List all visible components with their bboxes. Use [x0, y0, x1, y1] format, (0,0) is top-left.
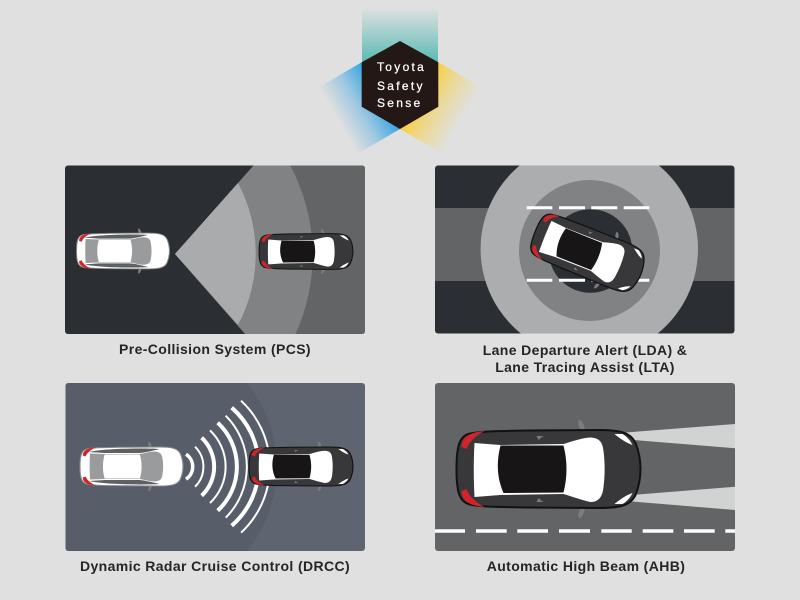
logo text: Safety [377, 79, 425, 93]
lower lane dashes [527, 279, 649, 282]
upper lane dashes [527, 206, 649, 209]
lower light beam [623, 487, 735, 510]
inner circle [549, 209, 632, 293]
panel: Pre-Collision System [65, 165, 365, 335]
label: DRCC: Dynamic Radar Cruise Control (DRCC) [80, 558, 350, 574]
logo text [377, 60, 426, 110]
panel: Automatic High Beam [435, 383, 735, 551]
logo: Toyota Safety Sense hexagon [314, 8, 486, 157]
panel background [435, 383, 735, 551]
panel background [435, 165, 735, 334]
label: AHB: Automatic High Beam (AHB) [487, 558, 685, 574]
dark car ahead [249, 442, 353, 491]
logo text: Toyota [377, 60, 426, 74]
logo text: Sense [377, 96, 423, 110]
logo light: yellow beam [400, 62, 486, 157]
panel: Dynamic Radar Cruise Control [65, 383, 365, 551]
logo hexagon [362, 41, 438, 129]
logo light: blue beam [314, 62, 400, 157]
radar waves [186, 401, 270, 533]
dark car ahead [259, 229, 353, 274]
lane dashes [435, 529, 735, 533]
road band [435, 208, 735, 281]
label: LTA line: Lane Tracing Assist (LTA) [495, 359, 675, 375]
dark car drifting [530, 214, 645, 292]
middle sensing zone [175, 165, 313, 335]
panel background [65, 165, 365, 335]
panel background [65, 383, 365, 551]
upper light beam [623, 424, 735, 448]
logo light: teal beam [362, 8, 438, 64]
inner sensing cone [175, 183, 256, 325]
panel: Lane Departure Alert [435, 166, 734, 334]
white car [80, 442, 183, 491]
outer circle [480, 166, 698, 334]
label: LDA and LTA: Lane Departure Alert (LDA) & [483, 342, 687, 358]
outer sensing zone [175, 165, 365, 335]
radar zone [66, 383, 68, 551]
white car [77, 228, 169, 274]
dark car [456, 419, 640, 519]
middle circle [519, 180, 660, 321]
label: PCS: Pre-Collision System (PCS) [119, 341, 311, 357]
